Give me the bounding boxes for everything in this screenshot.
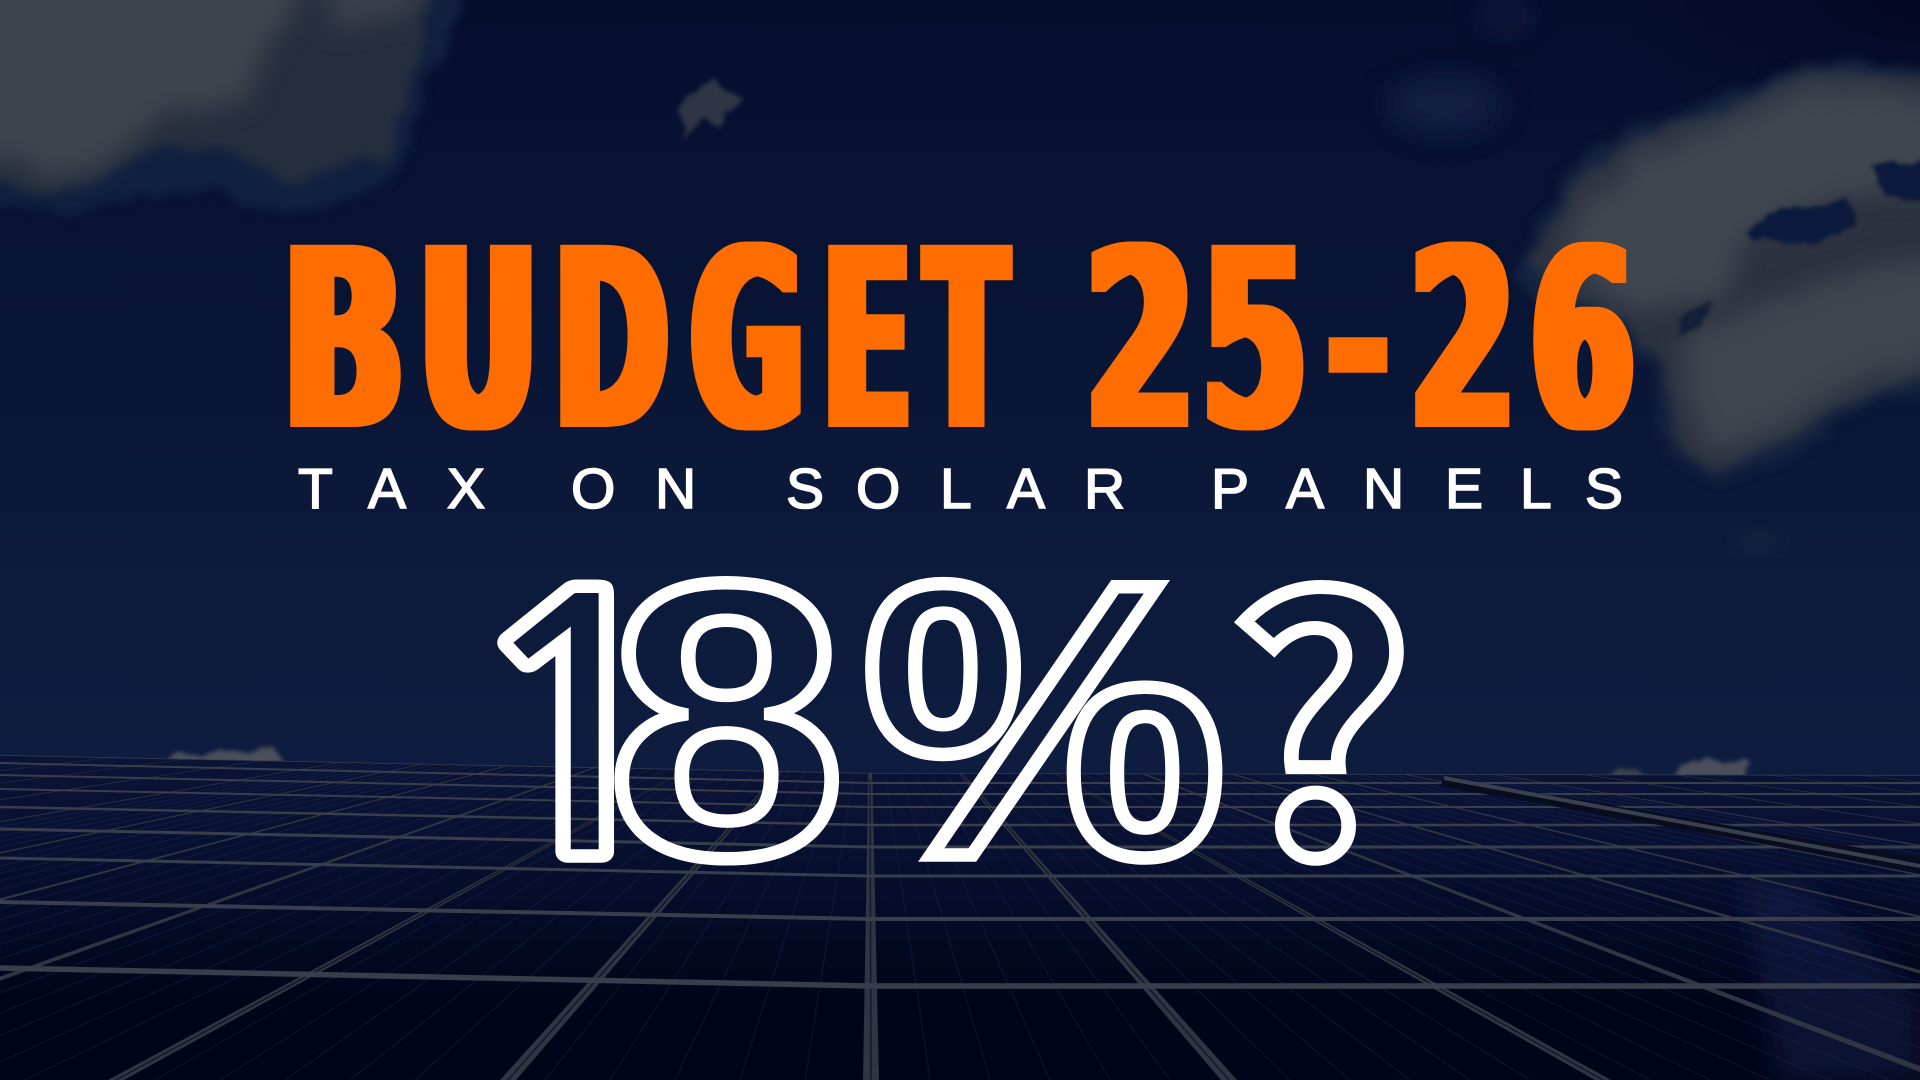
big outlined figure: 18%? <box>453 454 1414 953</box>
heading: BUDGET 25-26 <box>282 195 1634 487</box>
heading: BUDGET 25-26: 2 <box>1410 195 1515 486</box>
cloud: small top centre <box>678 76 745 138</box>
cloud gaps: dark sky holes in right cloud <box>1675 155 1920 335</box>
rail centre seams <box>116 772 1604 1080</box>
heading: BUDGET 25-26: E <box>824 195 911 486</box>
cloud: large right <box>1515 62 1920 484</box>
heading: BUDGET 25-26: T <box>927 196 1006 487</box>
heading: BUDGET 25-26: - <box>1328 196 1388 487</box>
cloud: top-left <box>0 0 485 215</box>
cloud: faint small right <box>1736 532 1780 552</box>
fine cell lines <box>0 763 1920 1080</box>
raised array edge at right <box>1440 777 1920 872</box>
subtitle: TAX ON SOLAR PANELS: TAXONSOLARPANELS <box>298 457 1623 521</box>
cloud: horizon right <box>1606 759 1750 785</box>
heading: BUDGET 25-26: D <box>555 195 668 487</box>
heading: BUDGET 25-26: G <box>691 195 804 487</box>
panel surface <box>0 755 1920 1080</box>
solar panel array <box>0 755 1920 1080</box>
heading: BUDGET 25-26: U <box>419 196 538 487</box>
heading: BUDGET 25-26: B <box>282 195 405 486</box>
big outlined figure: 18%?: 1 <box>453 557 698 908</box>
heading: BUDGET 25-26: 6 <box>1531 196 1634 487</box>
big outlined figure: 18%?: 8 <box>608 503 845 938</box>
cloud: horizon left <box>160 746 285 775</box>
reflection on panels <box>1740 880 1920 1080</box>
heading: BUDGET 25-26: 5 <box>1202 195 1307 486</box>
cloud: faint upper right <box>1387 1 1533 133</box>
panel frame rails: converging <box>0 758 1920 1080</box>
big outlined figure: 18%?: % <box>862 502 1226 938</box>
heading: BUDGET 25-26: 2 <box>1086 196 1195 487</box>
big outlined figure: 18%?: ? <box>1228 454 1414 953</box>
panel frame rails: horizontal <box>0 755 1920 986</box>
